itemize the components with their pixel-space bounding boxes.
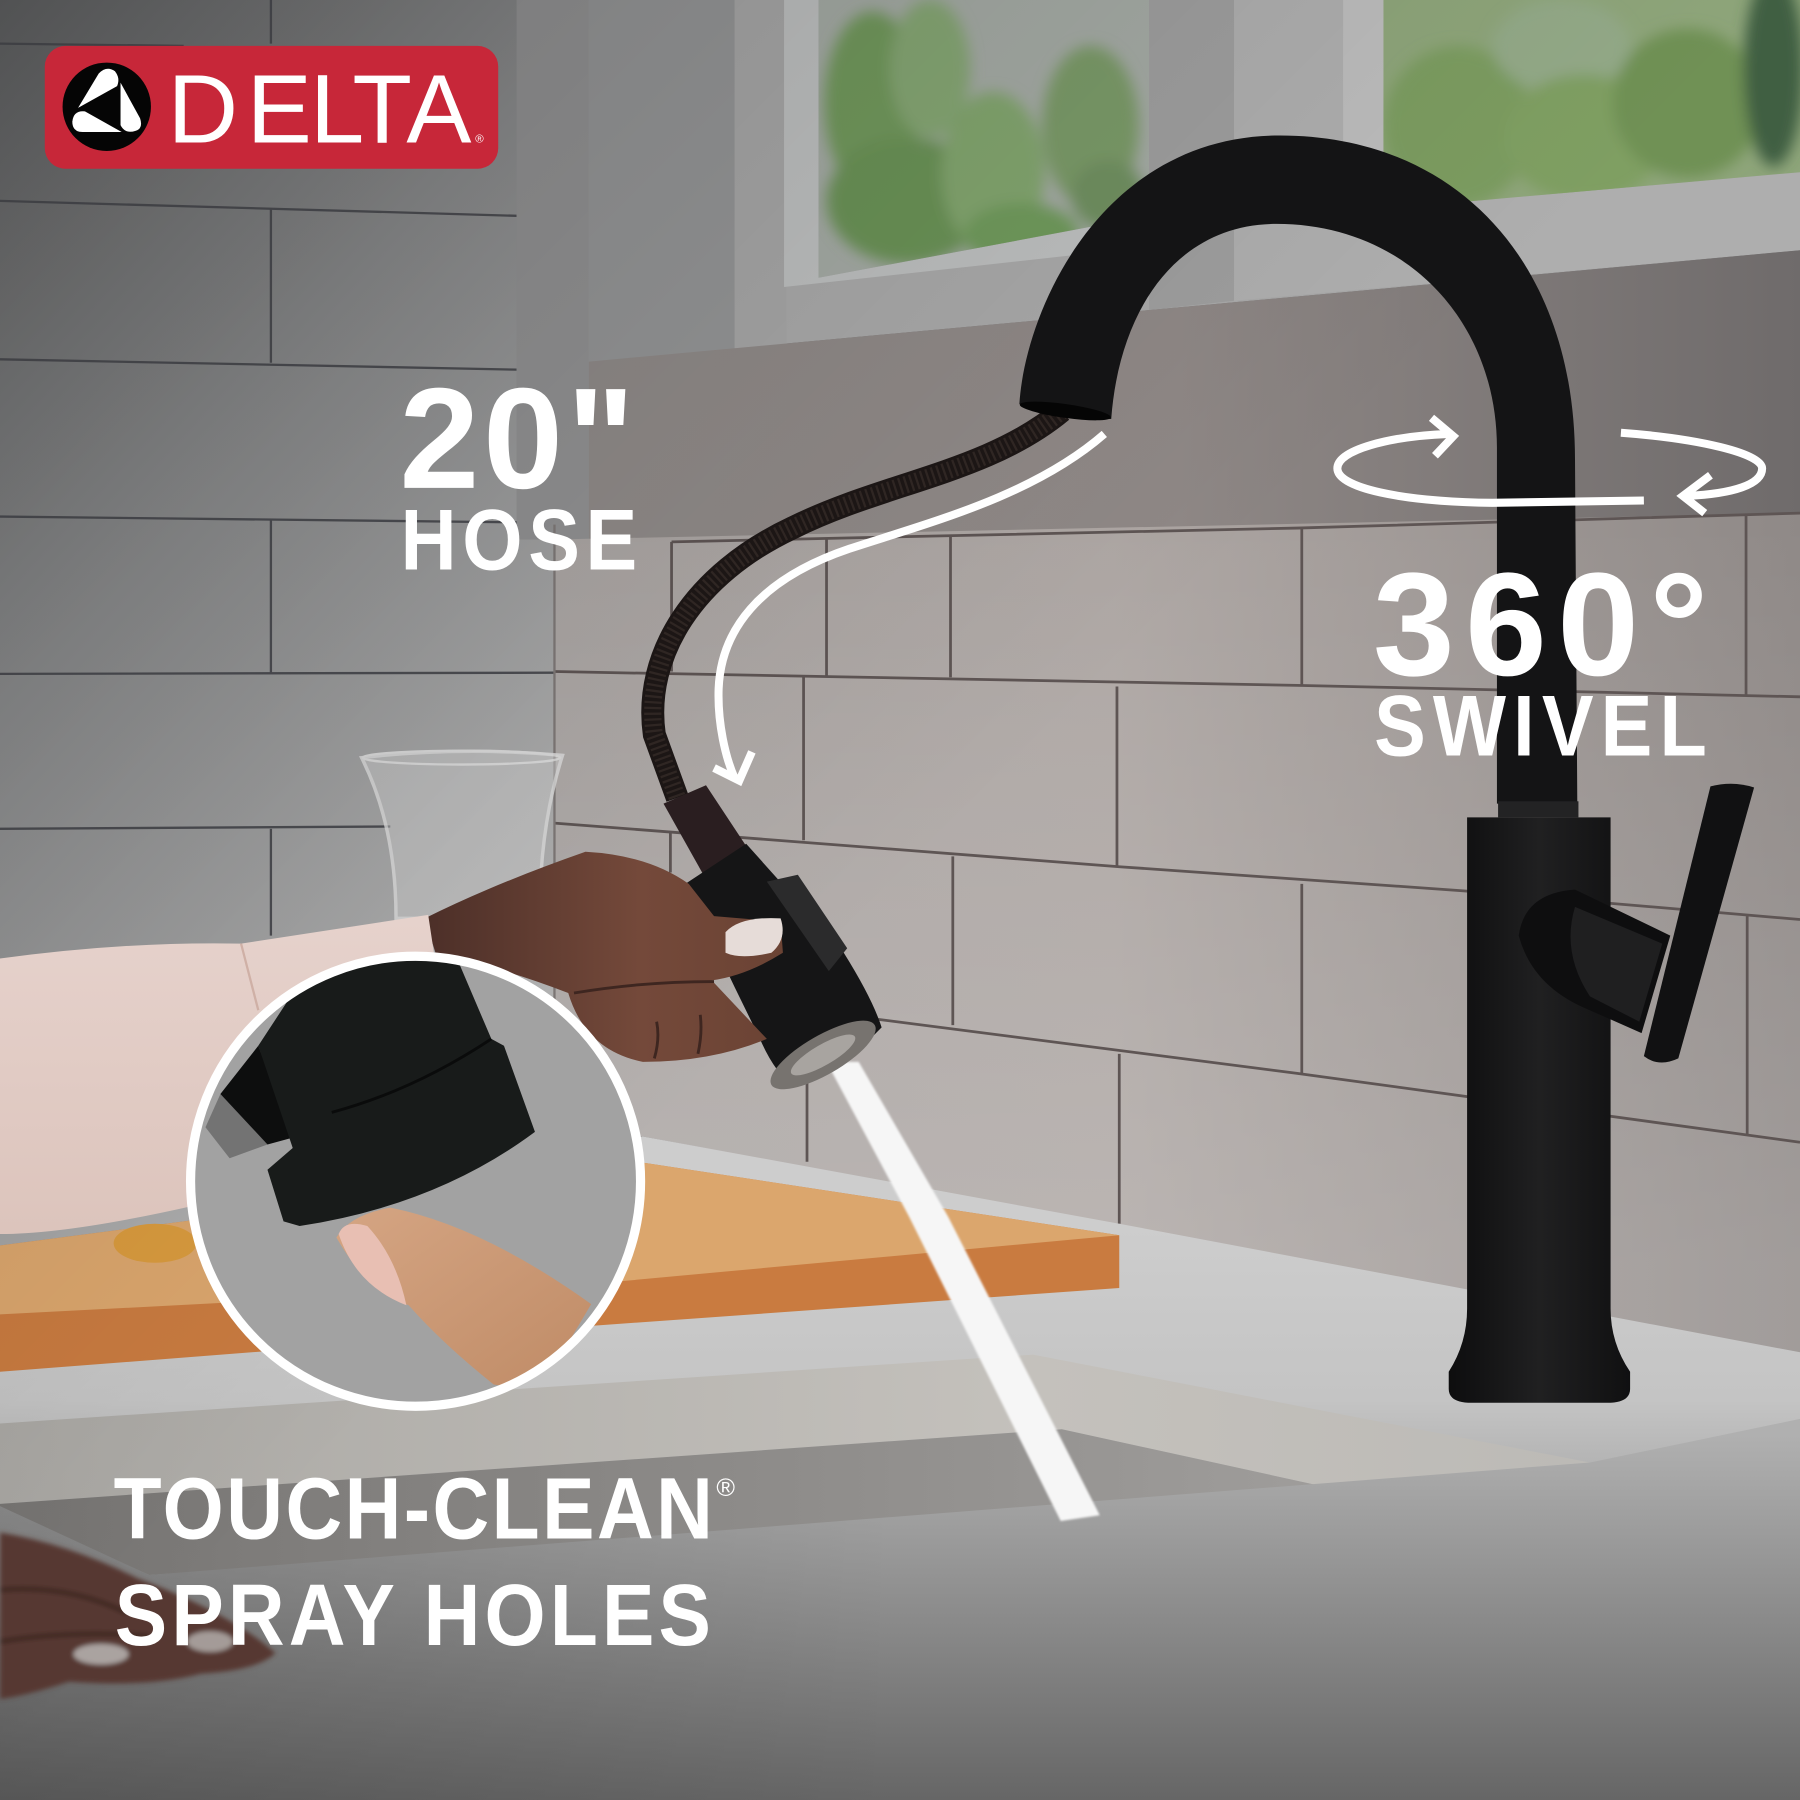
- sink basin: [0, 1429, 1360, 1575]
- logo mark: [63, 63, 151, 151]
- sink rim: [0, 1355, 1590, 1504]
- nozzle close-up: [205, 953, 535, 1226]
- wordmark: DELTA: [168, 54, 471, 163]
- backsplash tiles: [554, 513, 1800, 1355]
- window pane right: [1383, 0, 1800, 212]
- handle lever: [1644, 784, 1754, 1062]
- collar: [1498, 801, 1578, 817]
- pull-down hose: [653, 411, 1062, 798]
- spout outlet: [1019, 398, 1112, 424]
- handle hub: [1519, 890, 1670, 1033]
- spray head: [664, 785, 885, 1102]
- wordmark: ®: [475, 133, 484, 145]
- arrow: hose reach: [714, 434, 1104, 781]
- water stream: [827, 1062, 1100, 1521]
- spout: [1019, 135, 1577, 804]
- left wall with tiles: [0, 0, 597, 1297]
- inset circle: touch-clean close-up: [191, 953, 641, 1406]
- cutting board: [0, 1162, 1119, 1372]
- faucet: [1019, 135, 1754, 1403]
- Delta logo: [45, 46, 498, 169]
- label: touch-clean spray holes: SPRAY HOLES: [115, 1566, 711, 1664]
- label: touch-clean spray holes: TOUCH-CLEAN: [114, 1459, 713, 1557]
- label: touch-clean spray holes: [114, 1459, 735, 1664]
- body: [1449, 817, 1630, 1403]
- sleeve: [0, 915, 434, 1234]
- hand holding sprayer: [425, 852, 783, 1062]
- label: 360 degree swivel: SWIVEL: [1374, 679, 1707, 774]
- backsplash upper band: [554, 250, 1800, 545]
- finger close-up: [336, 1208, 591, 1391]
- arrow: swivel rotation: [1337, 418, 1762, 513]
- label: 20 inch hose: [399, 359, 637, 588]
- glass vase: [362, 751, 562, 918]
- window pane left: [818, 0, 1149, 281]
- foreground counter: [0, 1419, 1800, 1800]
- countertop: [0, 1136, 1800, 1800]
- window: [589, 0, 1800, 362]
- label: touch-clean spray holes: ®: [716, 1474, 735, 1502]
- label: 360 degree swivel: 360°: [1373, 543, 1708, 707]
- label: 20 inch hose: 20": [399, 359, 635, 519]
- hand resting at sink: [0, 1533, 276, 1699]
- label: 20 inch hose: HOSE: [401, 493, 637, 588]
